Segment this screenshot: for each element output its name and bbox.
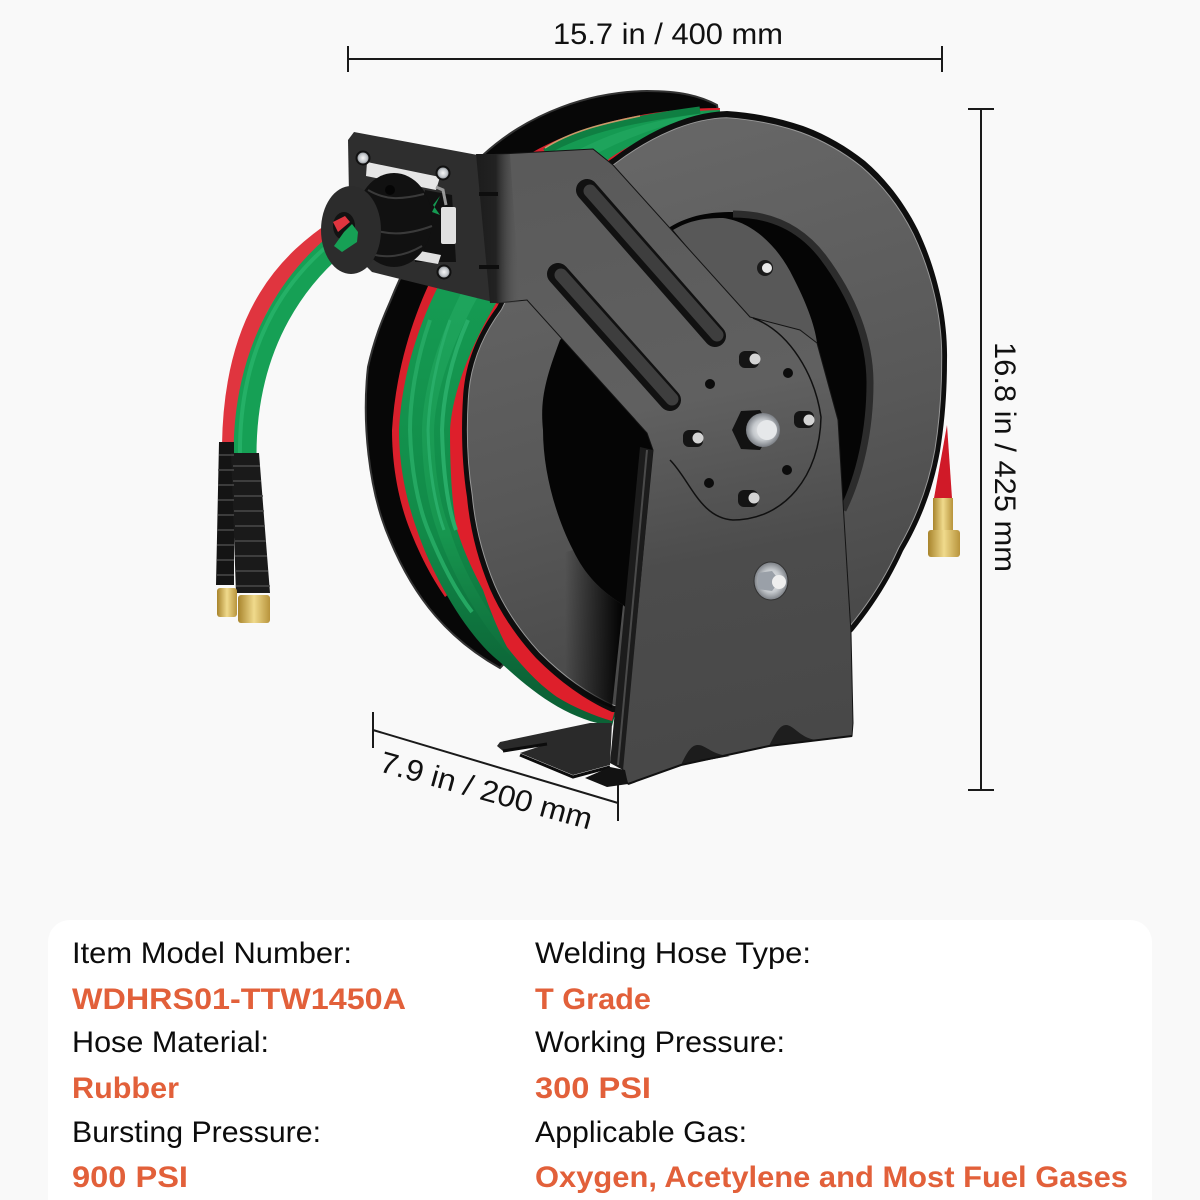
center axle nut (732, 410, 780, 450)
plate bolts and holes (683, 351, 814, 507)
spec: applicable gas (535, 1116, 1128, 1194)
spec: applicable gas: Applicable Gas: (535, 1116, 747, 1149)
spec: welding hose type (535, 937, 811, 1016)
hose inlet rollers (366, 162, 456, 264)
foot plate (497, 723, 628, 787)
specification panel (48, 920, 1152, 1200)
spec: welding hose type: T Grade (535, 983, 651, 1016)
dimension: width 15.7 in / 400 mm: 15.7 in / 400 mm (553, 18, 783, 51)
bearing plate outline (670, 318, 821, 520)
spec: item model number: Item Model Number: (72, 937, 352, 970)
back flange (366, 91, 760, 668)
spec: bursting pressure: Bursting Pressure: (72, 1116, 321, 1149)
stand folded edge (610, 447, 653, 770)
dimension: width 15.7 in / 400 mm (348, 18, 942, 72)
spec: hose material: Hose Material: (72, 1026, 269, 1059)
spec: welding hose type: Welding Hose Type: (535, 937, 811, 970)
wound hose coils (392, 108, 720, 726)
spec: working pressure (535, 1026, 785, 1105)
arm embossed slots (558, 190, 717, 400)
plate screws (356, 152, 450, 278)
hose guide knob (321, 173, 432, 274)
spec: bursting pressure: 900 PSI (72, 1161, 188, 1194)
dimension: height 16.8 in / 425 mm (968, 109, 1021, 790)
spec: working pressure: Working Pressure: (535, 1026, 785, 1059)
mounting plate (348, 132, 497, 303)
shaded notches on stand base (628, 725, 852, 784)
spec: item model number (72, 937, 406, 1016)
bracket arm and stand (483, 149, 853, 784)
flange centre opening (540, 212, 873, 708)
hose reel product (216, 91, 960, 787)
brass end fittings (217, 588, 270, 623)
bracket fold (476, 154, 520, 303)
spec: applicable gas: Oxygen, Acetylene and Most Fuel Gases (535, 1161, 1128, 1194)
dimension: depth 7.9 in / 200 mm (373, 712, 618, 836)
dimension: depth 7.9 in / 200 mm: 7.9 in / 200 mm (376, 746, 596, 836)
front flange disc with rim (462, 111, 947, 720)
spec: hose material: Rubber (72, 1072, 179, 1105)
black hose sleeves (216, 442, 270, 593)
right hose end with brass fitting (928, 425, 960, 557)
spec: hose material (72, 1026, 269, 1105)
spec: working pressure: 300 PSI (535, 1072, 651, 1105)
inner hub disc (673, 218, 817, 343)
dimension: height 16.8 in / 425 mm: 16.8 in / 425 mm (988, 342, 1021, 572)
spec: bursting pressure (72, 1116, 321, 1194)
spec: item model number: WDHRS01-TTW1450A (72, 983, 406, 1016)
left hanging hoses (230, 226, 352, 458)
lower bolt (754, 562, 788, 600)
